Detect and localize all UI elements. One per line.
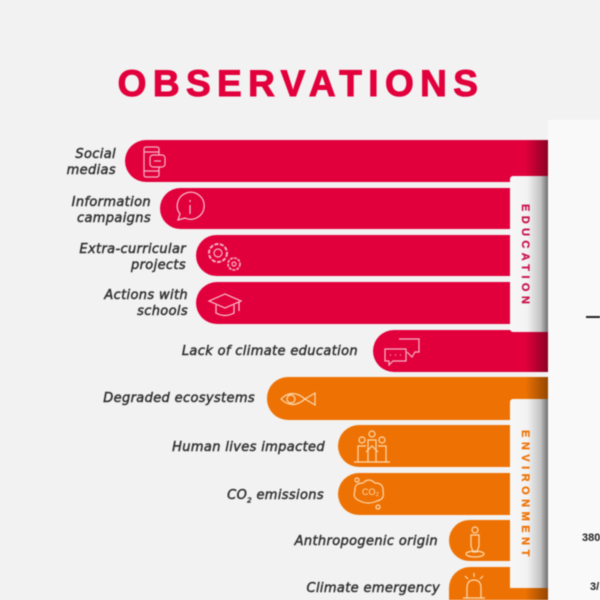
bar: anthropogenic origin [449,520,510,561]
label: actions with schools [102,288,188,319]
shadow on education bar end [525,140,548,176]
cropped number: 38: 380 [582,532,600,544]
shadow on lack of education bar end [525,332,548,372]
right white page [548,120,600,600]
icon: speech bubbles [384,338,420,366]
shadow on bottom strip [525,588,548,600]
tab label: education: EDUCATION [519,204,531,308]
tab label: environment: ENVIRONMENT [519,430,531,561]
label: human lives impacted: Human lives impacted [172,440,325,455]
label: anthropogenic origin: Anthropogenic origin [295,534,438,549]
label: actions with schools: Actions with [104,288,188,303]
icon: gears [207,242,242,272]
label: climate emergency: Climate emergency [307,581,440,596]
bar: lack of climate education [373,330,548,372]
label: information campaigns [71,195,152,226]
icon: fish [280,392,316,406]
bar: information campaigns [160,188,510,229]
icon: people [353,430,391,464]
label: information campaigns: campaigns [77,211,151,226]
dash mark [586,316,600,318]
label: social medias [66,147,116,178]
label: information campaigns: Information [72,195,151,210]
icon: graduation cap [207,292,243,317]
icon: person on pin [464,526,486,558]
tab: environment [510,399,548,588]
bar: climate emergency [449,567,510,600]
label: actions with schools: schools [137,304,188,319]
label: extra-curricular projects [78,242,188,273]
bar: CO2 emissions [338,473,510,515]
label: extra-curricular projects: projects [131,258,186,273]
bar: degraded ecosystems [267,377,548,420]
tab: education [510,176,548,332]
label: extra-curricular projects: Extra-curricular [79,242,186,257]
cropped number: 3: 3/ [590,581,599,593]
label: degraded ecosystems: Degraded ecosystems [103,391,255,406]
title: OBSERVATIONS [118,63,484,104]
bar: actions with schools [196,282,510,324]
icon: information bubble [176,190,206,222]
icon: alarm bell [462,572,486,600]
label: social medias: Social [75,147,116,162]
label: social medias: medias [67,163,116,178]
icon: CO2 cloud: CO₂ [362,487,380,497]
label: lack of climate education: Lack of climate education [182,344,358,359]
bar: human lives impacted [338,425,510,467]
bar: orange strip below environment tab [510,588,548,600]
icon: CO2 cloud [352,476,385,510]
shadow on environment bar end [525,377,548,399]
bar: social medias [125,140,548,182]
label: CO2 emissions: CO2 emissions [227,488,324,505]
icon: phone with chat [142,146,166,178]
bar: extra-curricular projects [196,235,510,276]
